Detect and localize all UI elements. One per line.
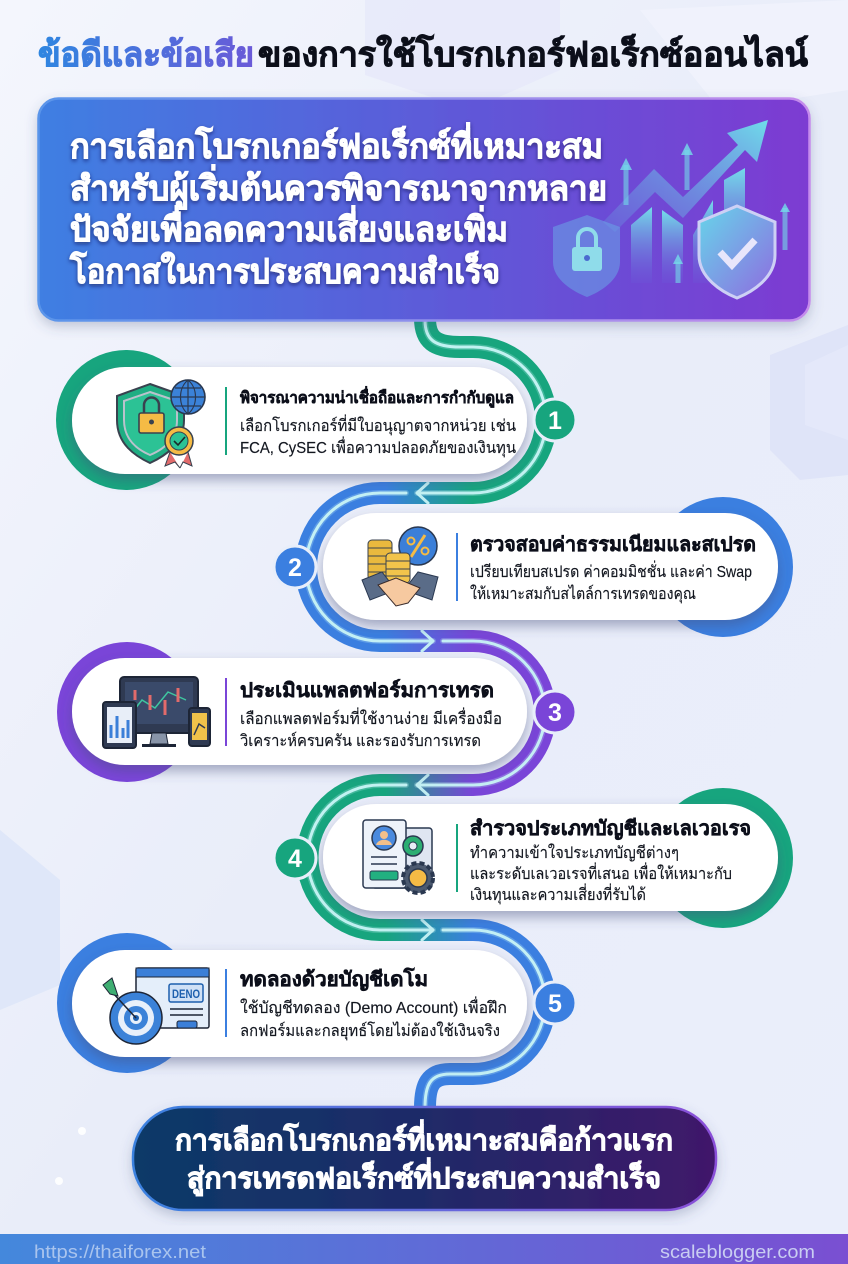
panel: step 5 (57, 933, 527, 1073)
step 2 text: ให้เหมาะสมกับสไตล์การเทรดของคุณ (470, 584, 696, 604)
badge 1 (534, 399, 576, 441)
badge 5 (534, 982, 576, 1024)
footer bar: scaleblogger.com (660, 1242, 815, 1262)
hero headline: สำหรับผู้เริ่มต้นควรพิจารณาจากหลาย (70, 164, 607, 210)
badge 2 (274, 546, 316, 588)
step 5 text: ลกฟอร์มและกลยุทธ์โดยไม่ต้องใช้เงินจริง (240, 1021, 500, 1041)
badge 3: 3 (548, 699, 562, 727)
snake connector ribbon (306, 318, 546, 1108)
step 1 text (240, 386, 516, 458)
footer bar (0, 1234, 848, 1264)
panel: step 3 (57, 642, 527, 782)
step 1 text: เลือกโบรกเกอร์ที่มีใบอนุญาตจากหน่วย เช่น (240, 414, 516, 436)
panel: step 4 (323, 788, 793, 928)
badge 3 (534, 691, 576, 733)
divider (225, 678, 227, 746)
step 5 text: ทดลองด้วยบัญชีเดโม (240, 967, 428, 991)
step 2 text: เปรียบเทียบสเปรด ค่าคอมมิชชั่น และค่า Swap (470, 560, 752, 581)
step 5 text: ใช้บัญชีทดลอง (Demo Account) เพื่อฝึก (240, 996, 507, 1017)
step 3 text: ประเมินแพลตฟอร์มการเทรด (240, 679, 494, 702)
step 4 text: เงินทุนและความเสี่ยงที่รับได้ (470, 883, 646, 905)
hero headline: ปัจจัยเพื่อลดความเสี่ยงและเพิ่ม (70, 205, 508, 249)
hero headline: การเลือกโบรกเกอร์ฟอเร็กซ์ที่เหมาะสม (70, 122, 603, 166)
step 3 text: วิเคราะห์ครบครัน และรองรับการเทรด (240, 731, 481, 750)
icon: shield, globe and badge (117, 380, 205, 468)
icon: demo window and target: DENO (172, 987, 200, 1001)
badge 5: 5 (548, 990, 562, 1018)
badge 1: 1 (548, 407, 562, 435)
icon: demo window and target (103, 968, 209, 1044)
step 1 text: พิจารณาความน่าเชื่อถือและการกำกับดูแล (240, 386, 514, 409)
hero headline (69, 122, 607, 291)
badge 4 (274, 837, 316, 879)
divider (456, 824, 458, 892)
step 4 text: สำรวจประเภทบัญชีและเลเวอเรจ (470, 817, 751, 840)
call to action banner (133, 1107, 716, 1210)
badge 2: 2 (288, 554, 302, 582)
divider (225, 969, 227, 1037)
badge 4: 4 (288, 845, 302, 873)
footer bar: https://thaiforex.net (34, 1242, 206, 1262)
icon: trading devices (103, 677, 210, 748)
step 4 text (470, 817, 751, 905)
call to action banner: สู่การเทรดฟอเร็กซ์ที่ประสบความสำเร็จ (187, 1157, 661, 1196)
panel: step 1 (56, 350, 527, 490)
divider (456, 533, 458, 601)
hero headline: โอกาสในการประสบความสำเร็จ (69, 250, 500, 291)
step 2 text: ตรวจสอบค่าธรรมเนียมและสเปรด (470, 533, 756, 556)
step number badges (274, 399, 576, 1024)
icon: growth chart with shields (553, 120, 790, 298)
step 4 text: ทำความเข้าใจประเภทบัญชีต่างๆ (470, 843, 679, 862)
hero banner (38, 98, 810, 320)
step 4 text: และระดับเลเวอเรจที่เสนอ เพื่อให้เหมาะกับ (470, 862, 732, 883)
step 2 text (470, 533, 756, 604)
title (38, 33, 808, 74)
icon: account documents and gear (363, 820, 433, 893)
step 5 text (240, 967, 507, 1041)
title: ข้อดีและข้อเสีย (38, 36, 254, 74)
step 1 text: FCA, CySEC เพื่อความปลอดภัยของเงินทุน (240, 436, 516, 458)
step 3 text (240, 679, 502, 750)
call to action banner: การเลือกโบรกเกอร์ที่เหมาะสมคือก้าวแรก (175, 1119, 673, 1157)
title: ของการใช้โบรกเกอร์ฟอเร็กซ์ออนไลน์ (258, 33, 808, 74)
panel: step 2 (323, 497, 793, 637)
divider (225, 387, 227, 455)
step 3 text: เลือกแพลตฟอร์มที่ใช้งานง่าย มีเครื่องมือ (240, 707, 502, 728)
icon: coins and handshake (362, 527, 438, 606)
